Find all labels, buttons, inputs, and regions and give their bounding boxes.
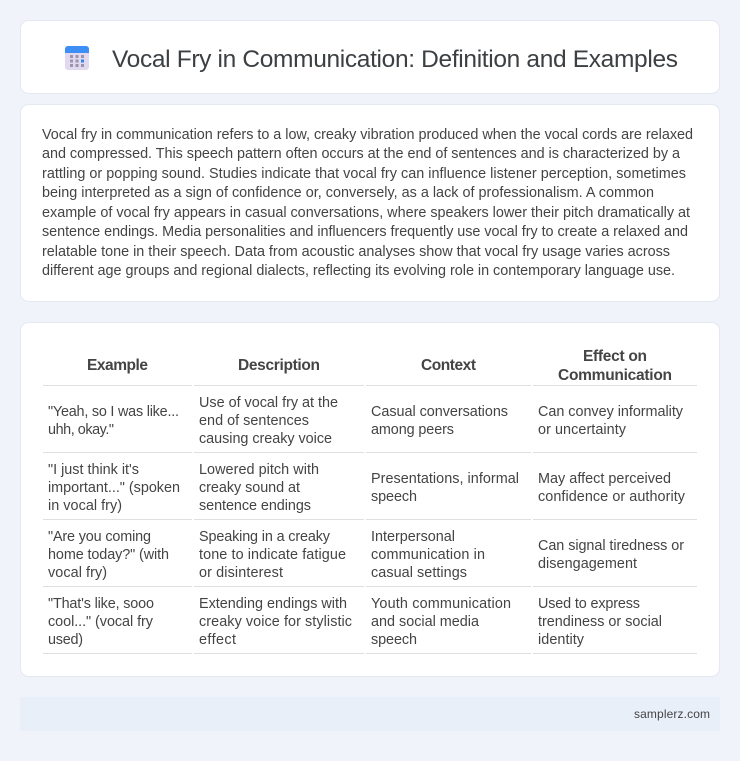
table row 4: cool..." (vocal fry: [48, 614, 154, 630]
table header: Context: [421, 357, 476, 374]
table row 2: Lowered pitch with: [199, 462, 319, 478]
table row 4: creaky voice for stylistic: [199, 614, 352, 630]
table row 4: and social media: [371, 614, 479, 630]
title: Vocal Fry in Communication: Definition and Examples: [112, 46, 678, 73]
table row 3: or disinterest: [199, 565, 283, 581]
table row 1: Use of vocal fry at the: [199, 395, 338, 411]
table header: Example: [87, 357, 148, 374]
table row 4: used): [48, 632, 83, 648]
table row 2: sentence endings: [199, 498, 311, 514]
table row 2: creaky sound at: [199, 480, 300, 496]
table row 4: effect: [199, 632, 236, 648]
table row 3: "Are you coming: [48, 529, 151, 545]
panel: intro paragraph: [20, 104, 720, 302]
panel: intro paragraph: Vocal fry in communication refers to a low, creaky vibration produced when the vocal cords are relaxed: [42, 127, 693, 143]
table row 1: uhh, okay.": [48, 422, 114, 438]
table row 2: important..." (spoken: [48, 480, 180, 496]
table row 4: [48, 596, 662, 648]
table header: Effect on: [583, 348, 647, 365]
table row 1: among peers: [371, 422, 454, 438]
table row 1: end of sentences: [199, 413, 309, 429]
table header: Description: [238, 357, 320, 374]
panel: intro paragraph: example of vocal fry appears in casual conversations, where speakers lower their pitch dramatically at: [42, 205, 690, 221]
table row 3: vocal fry): [48, 565, 107, 581]
panel: intro paragraph: sentence endings. Media personalities and influencers frequently use vocal fry to create a relaxed and: [42, 224, 688, 240]
table row 1: or uncertainty: [538, 422, 627, 438]
panel: intro paragraph: relatable tone in their speech. Data from acoustic analyses show that vocal fry usage varies across: [42, 244, 670, 260]
table row 4: Youth communication: [371, 596, 511, 612]
panel: intro paragraph: rattling or popping sound. Studies indicate that vocal fry can influence listener perception, sometimes: [42, 166, 686, 182]
table row 2: confidence or authority: [538, 489, 686, 505]
table row 2: Presentations, informal: [371, 471, 519, 487]
panel: intro paragraph: different age groups and regional dialects, reflecting its evolving role in contemporary language use.: [42, 263, 675, 279]
table row 4: identity: [538, 632, 585, 648]
table row 3: casual settings: [371, 565, 467, 581]
table row 1: causing creaky voice: [199, 431, 332, 447]
table row 4: Used to express: [538, 596, 640, 612]
footer bar: [20, 697, 720, 731]
panel: examples table: [20, 322, 720, 676]
table row 2: "I just think it's: [48, 462, 139, 478]
table row 3: disengagement: [538, 556, 637, 572]
table row 3: [48, 529, 684, 581]
header panel: [20, 20, 720, 94]
table row 1: Can convey informality: [538, 404, 684, 420]
table row 3: tone to indicate fatigue: [199, 547, 346, 563]
table header: [87, 348, 672, 384]
table row 4: trendiness or social: [538, 614, 662, 630]
footer bar: samplerz.com: [634, 707, 710, 721]
table row 1: [48, 395, 684, 447]
panel: intro paragraph: and compressed. This speech pattern often occurs at the end of sentences and is characterized by a: [42, 146, 680, 162]
table row 3: Speaking in a creaky: [199, 529, 331, 545]
panel: intro paragraph: being interpreted as a sign of confidence or, conversely, as a lack of professionalism. A common: [42, 185, 654, 201]
table row 4: "That's like, sooo: [48, 596, 154, 612]
table row 2: [48, 462, 686, 514]
table row 3: communication in: [371, 547, 485, 563]
table row 4: Extending endings with: [199, 596, 347, 612]
table row 3: Interpersonal: [371, 529, 455, 545]
table row 1: Casual conversations: [371, 404, 508, 420]
table row 1: "Yeah, so I was like...: [48, 404, 179, 420]
table row 2: speech: [371, 489, 417, 505]
table header: Communication: [558, 367, 672, 384]
table row 2: in vocal fry): [48, 498, 122, 514]
table row 3: Can signal tiredness or: [538, 538, 684, 554]
table row 3: home today?" (with: [48, 547, 169, 563]
table row 2: May affect perceived: [538, 471, 671, 487]
table row 4: speech: [371, 632, 417, 648]
icon: calendar grid: [65, 46, 89, 70]
